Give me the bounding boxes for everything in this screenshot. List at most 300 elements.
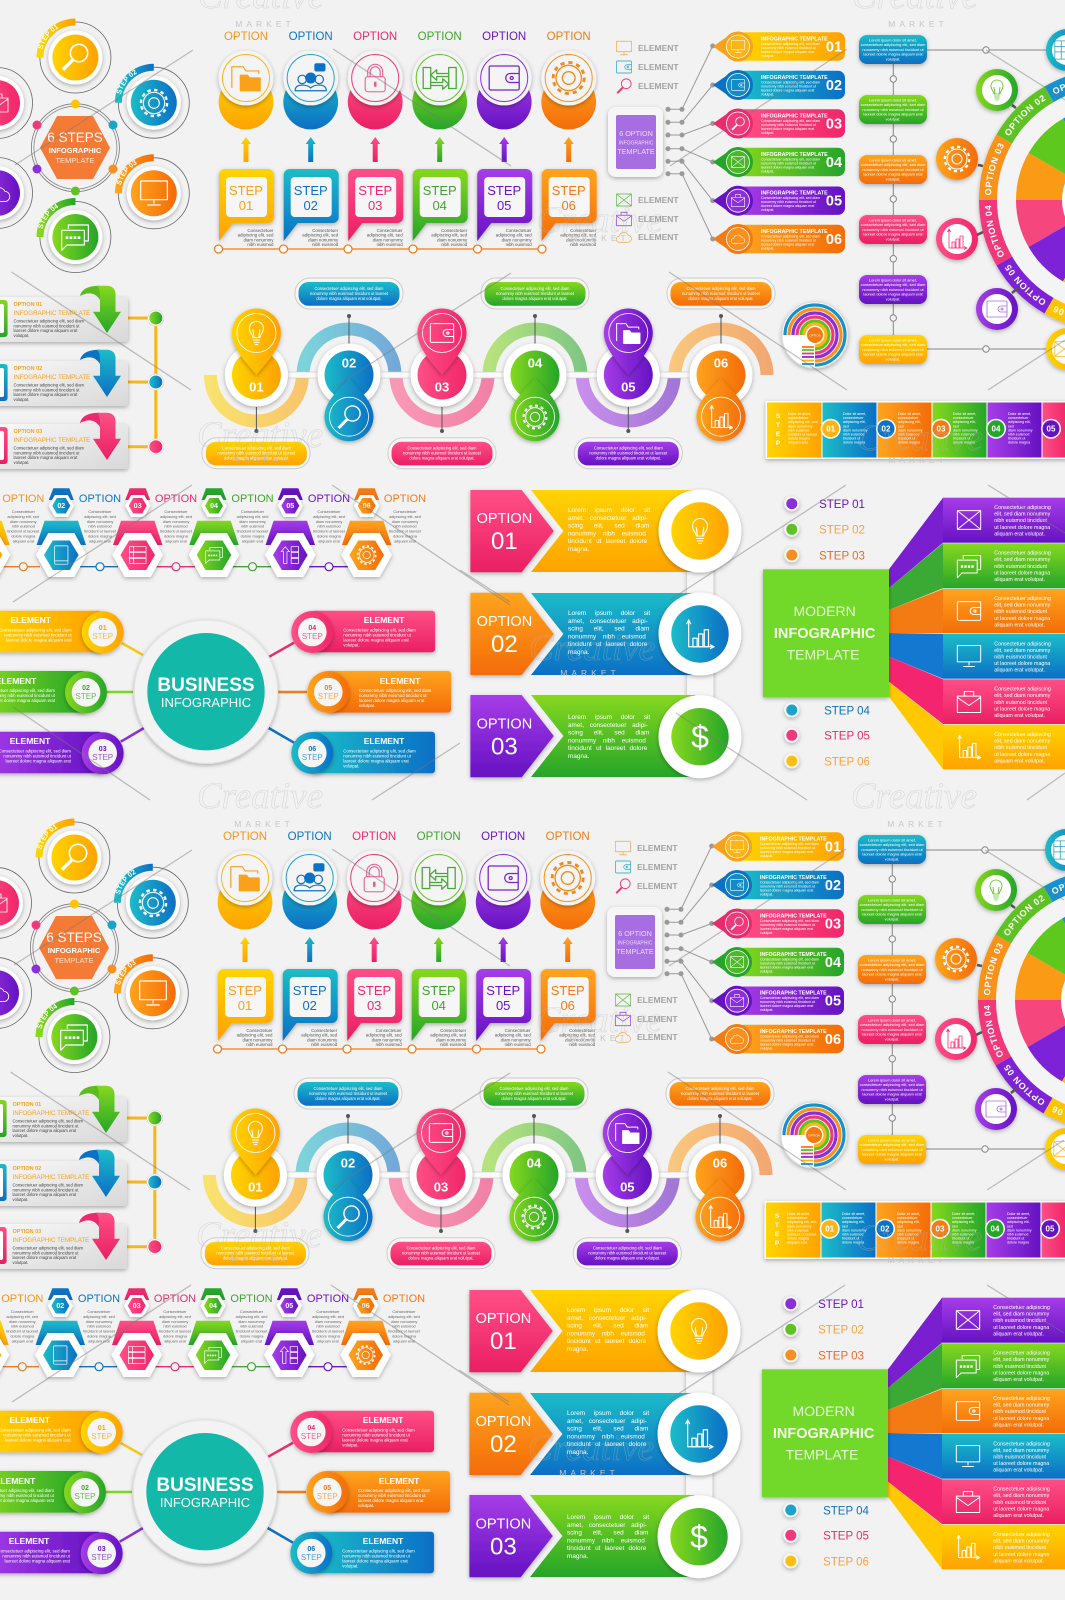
hexagon text: dolore magna bbox=[317, 534, 342, 538]
option columns text, lower sheet: Consectetuer bbox=[505, 1028, 531, 1033]
hexagon text: diam nonummy bbox=[392, 519, 418, 524]
hexagon text: aliquam erat bbox=[165, 538, 188, 543]
hub text bbox=[38, 24, 137, 229]
wave text: Consectetuer adipiscing elit, sed diam bbox=[315, 286, 384, 291]
wheel text: consectetuer adipiscing elit, sed diam bbox=[861, 222, 925, 227]
watermark overlay, upper sheet: MARKET bbox=[888, 455, 948, 465]
hub text, lower sheet: 6 STEPS bbox=[46, 930, 102, 945]
business text: volutpat. bbox=[359, 703, 375, 708]
option columns text: OPTION bbox=[289, 31, 333, 43]
option columns text: nibh euismod bbox=[312, 242, 339, 247]
wave text, lower sheet: nonummy nibh euismod tincidunt ut laoreet bbox=[216, 1250, 295, 1256]
chip text: laoreet dolore magna aliquam erat bbox=[761, 242, 814, 246]
business text, lower sheet: 05 bbox=[323, 1485, 331, 1492]
hexagon text, lower sheet: nibh euismod bbox=[316, 1324, 340, 1329]
chip text, lower sheet: Consectetuer adipiscing elit, sed diam bbox=[760, 880, 819, 884]
option columns text, lower sheet: diam nonummy bbox=[501, 1037, 532, 1042]
modern text: elit, sed diam nonummy bbox=[994, 648, 1051, 654]
option columns text, lower sheet: 02 bbox=[302, 998, 317, 1013]
chip text: laoreet dolore magna aliquam erat bbox=[761, 127, 814, 131]
wave text, lower sheet: 06 bbox=[713, 1156, 727, 1170]
wave text: adipiscing elit, sed bbox=[788, 420, 817, 424]
wheel text: consectetuer adipiscing elit, sed diam bbox=[861, 282, 925, 287]
wave text, lower sheet: Consectetuer adipiscing elit, sed diam bbox=[221, 1246, 290, 1250]
wheel text, lower sheet: OPTION 03 bbox=[984, 943, 1003, 995]
business text, lower sheet: ELEMENT bbox=[379, 1476, 420, 1486]
ribbons text, lower sheet: tincidunt ut laoreet dolore bbox=[567, 1545, 647, 1552]
hexagon text: 06 bbox=[363, 503, 371, 510]
modern text, lower sheet: Consectetuer adipiscing bbox=[993, 1396, 1050, 1402]
cards text: volutpat. bbox=[14, 333, 29, 338]
business text: nonummy nibh euismod tincidunt ut bbox=[359, 693, 427, 698]
modern text: nibh euismod tincidunt bbox=[994, 654, 1048, 660]
wave text, lower sheet: adipiscing elit, bbox=[897, 1220, 920, 1224]
cards text, lower sheet bbox=[12, 1102, 89, 1265]
modern text: Consectetuer adipiscing bbox=[994, 732, 1051, 738]
hexagon text, lower sheet: nibh euismod bbox=[11, 1324, 34, 1329]
wave text: nonummy nibh euismod tincidunt ut laoreet bbox=[496, 291, 575, 296]
business text, lower sheet: STEP bbox=[317, 1492, 338, 1501]
wave text: nibh euismod bbox=[898, 432, 919, 436]
business text, lower sheet: STEP bbox=[91, 1553, 112, 1562]
business text: ELEMENT bbox=[364, 736, 405, 746]
cards text, lower sheet: laoreet dolore magna aliquam erat bbox=[12, 1255, 77, 1260]
wave text, lower sheet: 01 bbox=[248, 1180, 263, 1194]
node 02 bbox=[318, 344, 380, 441]
wheel text, lower sheet: Lorem ipsum dolor sit amet, bbox=[868, 958, 916, 962]
hub text: 6 STEPS bbox=[47, 130, 103, 145]
wheel icon circles bbox=[936, 29, 1065, 370]
chip text, lower sheet: nonummy nibh euismod tincidunt ut bbox=[760, 923, 815, 927]
wheel text: Lorem ipsum dolor sit amet, bbox=[869, 158, 917, 162]
option columns text: 03 bbox=[368, 198, 382, 213]
chip text: Consectetuer adipiscing elit, sed diam bbox=[761, 119, 820, 123]
wave text, lower sheet: dolore magna aliquam erat volutpat. bbox=[408, 1256, 474, 1260]
wheel text: nonummy nibh euismod tincidunt ut bbox=[862, 347, 925, 352]
business text: nonummy nibh euismod tincidunt ut bbox=[3, 754, 72, 758]
wave text: dolore magna aliquam erat volutpat. bbox=[316, 296, 382, 301]
wave text, lower sheet: diam nonummy bbox=[897, 1228, 922, 1232]
wave text: dolore magna bbox=[898, 441, 920, 445]
modern text, lower sheet: STEP 01 bbox=[818, 1299, 864, 1311]
business text bbox=[0, 615, 432, 768]
modern text: Consectetuer adipiscing bbox=[994, 596, 1051, 602]
business text, lower sheet: ELEMENT bbox=[363, 1536, 404, 1546]
option columns text: OPTION bbox=[224, 31, 268, 43]
cards text: laoreet dolore magna aliquam erat bbox=[14, 328, 78, 333]
wave text: Dolor sit amet, bbox=[898, 412, 921, 416]
timeline lines bbox=[893, 50, 1060, 349]
modern text, lower sheet: aliquam erat volutpat. bbox=[993, 1513, 1044, 1519]
option columns text: adipiscing elit, sed bbox=[302, 233, 339, 238]
hex 04 bbox=[189, 488, 239, 577]
option columns text, lower sheet: 01 bbox=[238, 998, 252, 1013]
wave text: diam nonummy bbox=[788, 424, 813, 428]
business text, lower sheet: ELEMENT bbox=[9, 1536, 50, 1546]
chip text: TEMPLATE bbox=[617, 147, 655, 156]
chip text, lower sheet: laoreet dolore magna aliquam erat bbox=[760, 966, 813, 970]
panel: wheel diagram, lower sheet bbox=[856, 828, 1065, 1174]
panel: six option chip diagram, lower sheet bbox=[607, 832, 844, 1054]
hexagon text, lower sheet: nibh euismod bbox=[392, 1324, 416, 1329]
hexagon text: dolore magna bbox=[393, 534, 418, 538]
chip bbox=[608, 107, 663, 177]
hexagon text: nibh euismod bbox=[317, 524, 341, 529]
modern text, lower sheet: aliquam erat volutpat. bbox=[993, 1558, 1044, 1564]
wave text, lower sheet: aliquam erat. bbox=[787, 1241, 808, 1245]
hexagon text, lower sheet: nibh euismod bbox=[240, 1324, 263, 1329]
option columns text: diam nonummy bbox=[308, 237, 339, 242]
option columns text, lower sheet: 04 bbox=[431, 998, 446, 1013]
option columns text, lower sheet: nibh euismod bbox=[311, 1042, 338, 1047]
chip text: Consectetuer adipiscing elit, sed diam bbox=[761, 80, 820, 84]
ribbons text: tincidunt ut laoreet dolore bbox=[568, 745, 648, 752]
modern text: Consectetuer adipiscing bbox=[994, 505, 1051, 511]
wheel text: nonummy nibh euismod tincidunt ut bbox=[862, 287, 925, 292]
hub text, lower sheet: TEMPLATE bbox=[54, 956, 94, 965]
chip text, lower sheet: laoreet dolore magna aliquam erat bbox=[760, 1004, 813, 1008]
bar 06 bbox=[713, 224, 845, 254]
cards text, lower sheet: Consectetuer adipiscing elit, sed diam bbox=[12, 1118, 84, 1124]
wave text, lower sheet: dolore magna bbox=[952, 1241, 974, 1245]
business text: laoreet dolore magna aliquam erat bbox=[6, 638, 73, 642]
option columns text, lower sheet: STEP bbox=[486, 983, 520, 998]
option columns text: STEP bbox=[552, 183, 586, 198]
wave text, lower sheet: nibh euismod bbox=[787, 1228, 808, 1232]
ribbons text: 01 bbox=[491, 528, 518, 555]
ribbons text, lower sheet: Lorem ipsum dolor sit bbox=[567, 1307, 649, 1314]
ribbons text, lower sheet: magna. bbox=[567, 1449, 589, 1456]
wave text, lower sheet: OPTION bbox=[808, 1134, 820, 1138]
wave text: sed bbox=[1008, 424, 1014, 428]
hexagon text, lower sheet: nibh euismod bbox=[163, 1324, 187, 1329]
business text, lower sheet: volutpat. bbox=[342, 1564, 359, 1568]
chip text: Consectetuer adipiscing elit, sed diam bbox=[761, 234, 820, 238]
wave text, lower sheet: consectetuer bbox=[842, 1216, 863, 1220]
ribbons text: Lorem ipsum dolor sit bbox=[568, 507, 650, 514]
wave text, lower sheet: 04 bbox=[991, 1224, 1000, 1234]
hexagon text, lower sheet: OPTION bbox=[1, 1293, 43, 1305]
hexagon text: Consectetuer bbox=[88, 509, 112, 514]
wave text, lower sheet: adipiscing elit, sed bbox=[787, 1220, 816, 1224]
option columns text: nibh euismod bbox=[247, 242, 274, 247]
wheel text, lower sheet: laoreet dolore magna aliquam erat bbox=[862, 1152, 923, 1157]
hexagon text, lower sheet: OPTION bbox=[307, 1293, 349, 1305]
chip text: nonummy nibh euismod tincidunt ut bbox=[761, 162, 816, 166]
cards text, lower sheet: OPTION 03 bbox=[12, 1229, 41, 1235]
option columns text: 01 bbox=[239, 198, 253, 213]
option columns text: adipiscing elit, sed bbox=[431, 233, 468, 238]
wave text, lower sheet: Consectetuer adipiscing elit, sed diam bbox=[686, 1086, 755, 1091]
bar 02 bbox=[0, 671, 107, 713]
wave text, lower sheet: 05 bbox=[1046, 1224, 1055, 1234]
chip text, lower sheet: Consectetuer adipiscing elit, sed diam bbox=[760, 996, 819, 1000]
wave text, lower sheet: dolore magna aliquam erat volutpat. bbox=[223, 1256, 288, 1260]
column 02 bbox=[283, 51, 339, 241]
chip connectors bbox=[668, 46, 713, 239]
cards text: INFOGRAPHIC TEMPLATE bbox=[14, 310, 90, 317]
chip text: ELEMENT bbox=[638, 232, 679, 242]
hexagon text, lower sheet: OPTION bbox=[154, 1293, 196, 1305]
business text: Consectetuer adipiscing elit, sed diam bbox=[343, 628, 416, 632]
hexagon text, lower sheet bbox=[1, 1293, 425, 1343]
option columns text, lower sheet: nibh euismod bbox=[569, 1042, 596, 1047]
ribbons text: Lorem ipsum dolor sit bbox=[568, 610, 650, 617]
modern text: aliquam erat volutpat. bbox=[994, 758, 1045, 764]
hexagon text, lower sheet: adipiscing elit, sed bbox=[83, 1314, 115, 1319]
cards text: OPTION 03 bbox=[14, 429, 42, 435]
modern text: aliquam erat volutpat. bbox=[994, 668, 1045, 674]
wheel text: consectetuer adipiscing elit, sed diam bbox=[861, 162, 925, 167]
wave text, lower sheet: tincidunt ut bbox=[952, 1237, 969, 1241]
hexagon text, lower sheet: tincidunt ut laoreet bbox=[159, 1329, 192, 1334]
cards text, lower sheet: OPTION 01 bbox=[12, 1102, 41, 1108]
modern text, lower sheet: ut laoreet dolore magna bbox=[993, 1506, 1049, 1512]
wheel text, lower sheet: OPTION 05 bbox=[1004, 1064, 1044, 1105]
modern artwork bbox=[763, 496, 1065, 769]
modern text, lower sheet: elit, sed diam nonummy bbox=[993, 1403, 1050, 1409]
wave text, lower sheet: 04 bbox=[527, 1156, 542, 1170]
wave text, lower sheet: consectetuer bbox=[897, 1216, 918, 1220]
wave text, lower sheet: 05 bbox=[620, 1180, 635, 1194]
option columns text, lower sheet: STEP bbox=[293, 983, 327, 998]
chip text: Consectetuer adipiscing elit, sed diam bbox=[761, 196, 820, 200]
business text: laoreet dolore magna aliquam erat bbox=[343, 638, 410, 642]
watermark overlay, lower sheet: Creative bbox=[528, 1428, 654, 1469]
wave text, lower sheet: adipiscing elit, bbox=[952, 1220, 975, 1224]
modern text: nibh euismod tincidunt bbox=[994, 745, 1048, 751]
modern text, lower sheet: elit, sed diam nonummy bbox=[993, 1539, 1050, 1545]
modern text: elit, sed diam nonummy bbox=[994, 512, 1051, 518]
hub text, lower sheet: STEP 01 bbox=[37, 824, 58, 850]
cards text, lower sheet: nonummy nibh euismod tincidunt ut bbox=[12, 1250, 79, 1255]
hexagon text, lower sheet: dolore magna bbox=[316, 1334, 341, 1338]
modern text, lower sheet: elit, sed diam nonummy bbox=[993, 1448, 1050, 1454]
business text: 06 bbox=[308, 746, 316, 753]
chip text: INFOGRAPHIC TEMPLATE bbox=[761, 75, 828, 81]
cards text, lower sheet: INFOGRAPHIC TEMPLATE bbox=[12, 1174, 89, 1181]
modern text: STEP 01 bbox=[819, 499, 865, 511]
bar 01 bbox=[713, 32, 845, 62]
wave text: adipiscing elit, bbox=[953, 420, 976, 424]
option columns text: STEP bbox=[229, 183, 263, 198]
hexagon text: diam nonummy bbox=[316, 519, 342, 524]
wheel text, lower sheet: nonummy nibh euismod tincidunt ut bbox=[861, 1027, 924, 1032]
option columns text, lower sheet: nibh euismod bbox=[376, 1042, 402, 1047]
step circle 03 bbox=[118, 158, 189, 229]
wave text, lower sheet: dolore magna bbox=[787, 1237, 809, 1241]
business text: 03 bbox=[99, 746, 107, 753]
business text, lower sheet: Consectetuer adipiscing elit, sed diam bbox=[358, 1488, 431, 1493]
wheel text, lower sheet: consectetuer adipiscing elit, sed diam bbox=[860, 1082, 924, 1087]
chip text: Consectetuer adipiscing elit, sed diam bbox=[761, 42, 820, 46]
hexagon text, lower sheet: aliquam erat bbox=[317, 1338, 340, 1343]
hexagon text, lower sheet: dolore magna bbox=[163, 1334, 188, 1338]
hexagon text: OPTION bbox=[155, 493, 197, 505]
hexagon text, lower sheet: adipiscing elit, sed bbox=[388, 1314, 420, 1319]
chip text, lower sheet: Consectetuer adipiscing elit, sed diam bbox=[760, 958, 819, 962]
wave text, lower sheet: tincidunt ut bbox=[897, 1237, 914, 1241]
modern text, lower sheet: nibh euismod tincidunt bbox=[993, 1500, 1047, 1506]
chip text, lower sheet: ELEMENT bbox=[637, 843, 678, 853]
wheel text: consectetuer adipiscing elit, sed diam bbox=[861, 342, 925, 347]
ribbons text, lower sheet: $ bbox=[690, 1519, 708, 1555]
wheel text, lower sheet: volutpat. bbox=[885, 1156, 899, 1161]
wave text, lower sheet: consectetuer bbox=[1007, 1216, 1028, 1220]
cards text, lower sheet: INFOGRAPHIC TEMPLATE bbox=[12, 1237, 89, 1244]
option columns text, lower sheet bbox=[223, 831, 596, 1047]
wave text, lower sheet: diam nonummy bbox=[842, 1228, 867, 1232]
wheel text: volutpat. bbox=[886, 356, 900, 361]
wheel text, lower sheet: consectetuer adipiscing elit, sed diam bbox=[860, 842, 924, 847]
panel: option columns, lower sheet bbox=[214, 831, 596, 1053]
modern text, lower sheet: ut laoreet dolore magna bbox=[993, 1461, 1049, 1467]
wave text: sed bbox=[843, 424, 849, 428]
chip text, lower sheet bbox=[616, 836, 841, 1050]
ribbons text, lower sheet: tincidunt ut laoreet dolore bbox=[567, 1338, 647, 1345]
hexagon text: nibh euismod bbox=[393, 524, 417, 529]
hexagon text, lower sheet: Consectetuer bbox=[240, 1309, 264, 1314]
ribbon icons bbox=[957, 511, 981, 759]
cards text, lower sheet: nonummy nibh euismod tincidunt ut bbox=[12, 1187, 79, 1192]
option columns text, lower sheet: adipiscing elit, sed bbox=[237, 1033, 273, 1038]
wave text, lower sheet: E bbox=[775, 1231, 780, 1238]
modern text, lower sheet: aliquam erat volutpat. bbox=[993, 1377, 1044, 1383]
chip text: laoreet dolore magna aliquam erat bbox=[761, 88, 814, 92]
business text, lower sheet: STEP bbox=[301, 1553, 322, 1562]
ribbons text: 03 bbox=[491, 734, 518, 760]
hex timeline bbox=[0, 566, 348, 568]
business text, lower sheet: 04 bbox=[307, 1425, 315, 1432]
wave text: Consectetuer adipiscing elit, sed diam bbox=[594, 446, 663, 450]
option 02 row bbox=[470, 592, 742, 676]
cards text: INFOGRAPHIC TEMPLATE bbox=[14, 437, 90, 444]
hexagon text: tincidunt ut laoreet bbox=[84, 529, 117, 534]
wheel text: OPTION 05 bbox=[1004, 264, 1046, 305]
wave connecting bar bbox=[256, 372, 721, 378]
option columns text: adipiscing elit, sed bbox=[496, 233, 532, 238]
chip text: 06 bbox=[826, 232, 842, 248]
wave text: nonummy nibh euismod tincidunt ut laoreet bbox=[217, 450, 296, 456]
chip text, lower sheet: ELEMENT bbox=[637, 1014, 678, 1024]
business text, lower sheet: 01 bbox=[98, 1425, 106, 1432]
wave text: tincidunt ut bbox=[898, 437, 915, 441]
chip text, lower sheet: INFOGRAPHIC TEMPLATE bbox=[760, 875, 827, 881]
wave text: consectetuer bbox=[843, 416, 864, 420]
chip text, lower sheet: 05 bbox=[825, 994, 841, 1010]
wave text: Consectetuer adipiscing elit, sed diam bbox=[501, 286, 570, 291]
ribbons text, lower sheet: 02 bbox=[490, 1431, 517, 1458]
hub text: STEP 02 bbox=[116, 70, 137, 94]
hex 06 bbox=[341, 488, 392, 577]
business text, lower sheet: laoreet dolore magna aliquam erat bbox=[5, 1558, 71, 1564]
column 05 bbox=[477, 51, 532, 241]
cards text: volutpat. bbox=[14, 397, 29, 402]
modern text, lower sheet: TEMPLATE bbox=[786, 1446, 858, 1462]
ribbons text: magna. bbox=[568, 649, 590, 656]
wave text: P bbox=[776, 440, 781, 447]
chip text: ELEMENT bbox=[638, 62, 679, 72]
wave text, lower sheet: nibh euismod bbox=[952, 1232, 973, 1236]
watermark overlay, lower sheet: MARKET bbox=[234, 819, 294, 829]
wheel text, lower sheet: nonummy nibh euismod tincidunt ut bbox=[861, 967, 924, 972]
chip text: INFOGRAPHIC TEMPLATE bbox=[761, 114, 828, 120]
chip text, lower sheet: ELEMENT bbox=[637, 862, 678, 872]
watermark overlay, lower sheet: MARKET bbox=[231, 1253, 291, 1263]
wheel text: laoreet dolore magna aliquam erat bbox=[863, 52, 924, 57]
hub text, lower sheet: STEP 02 bbox=[116, 870, 136, 894]
option columns text, lower sheet: STEP bbox=[551, 983, 585, 998]
timeline nodes bbox=[890, 47, 989, 352]
business text, lower sheet: volutpat. bbox=[358, 1503, 374, 1508]
option columns text, lower sheet: 03 bbox=[367, 998, 381, 1013]
modern text, lower sheet: MODERN bbox=[792, 1403, 855, 1419]
wheel text, lower sheet: consectetuer adipiscing elit, sed diam bbox=[860, 962, 924, 967]
business text: STEP bbox=[92, 632, 113, 641]
watermark overlay, upper sheet bbox=[12, 0, 1065, 800]
wheel text: nonummy nibh euismod tincidunt ut bbox=[862, 47, 925, 52]
wave text: diam nonummy bbox=[953, 428, 978, 432]
node 03 bbox=[410, 308, 474, 406]
card 02 bbox=[0, 350, 128, 406]
cards text: OPTION 01 bbox=[14, 302, 42, 308]
wheel text: Lorem ipsum dolor sit amet, bbox=[869, 38, 917, 42]
wave text, lower sheet: nibh euismod bbox=[897, 1232, 918, 1236]
modern text, lower sheet bbox=[773, 1299, 1050, 1568]
wheel text: volutpat. bbox=[886, 176, 900, 181]
hexagon text: Consectetuer bbox=[393, 509, 417, 514]
wave text: adipiscing elit, bbox=[898, 420, 921, 424]
cards text: nonummy nibh euismod tincidunt ut bbox=[14, 387, 80, 392]
modern text: Consectetuer adipiscing bbox=[994, 551, 1051, 557]
hexagon text, lower sheet: diam nonummy bbox=[238, 1319, 265, 1324]
ribbon fronts bbox=[943, 498, 1065, 769]
business text: ELEMENT bbox=[380, 676, 421, 686]
wave text: adipiscing elit, bbox=[843, 420, 866, 424]
hexagon text, lower sheet: aliquam erat bbox=[164, 1338, 187, 1343]
wave text, lower sheet: dolore magna aliquam erat volutpat. bbox=[315, 1096, 381, 1101]
wave text, lower sheet: tincidunt ut bbox=[1007, 1237, 1024, 1241]
ribbons text, lower sheet: nonummy nibh euismod bbox=[567, 1433, 645, 1440]
option columns text, lower sheet: OPTION bbox=[546, 831, 590, 843]
option columns text, lower sheet: adipiscing elit, sed bbox=[366, 1033, 402, 1038]
wave text bbox=[217, 286, 1056, 460]
wave text, lower sheet: Dolor sit amet, bbox=[1007, 1212, 1030, 1216]
ribbons text: amet, consectetuer adipi- bbox=[568, 515, 648, 522]
option columns text: adipiscing elit, sed bbox=[560, 233, 597, 238]
watermark overlay, lower sheet: MARKET bbox=[887, 819, 947, 829]
ribbons text: tincidunt ut laoreet dolore bbox=[568, 641, 648, 648]
hexagon text, lower sheet: adipiscing elit, sed bbox=[236, 1314, 267, 1319]
bar 05 bbox=[713, 186, 845, 216]
bar 02 bbox=[713, 70, 845, 100]
wheel text, lower sheet: volutpat. bbox=[885, 1036, 899, 1041]
modern text bbox=[774, 499, 1051, 768]
modern text: STEP 05 bbox=[824, 731, 870, 743]
option columns text, lower sheet: STEP bbox=[422, 983, 456, 998]
chip text: INFOGRAPHIC TEMPLATE bbox=[761, 152, 828, 158]
modern text, lower sheet: elit, sed diam nonummy bbox=[993, 1493, 1050, 1499]
business text: INFOGRAPHIC bbox=[161, 695, 251, 710]
ribbons text, lower sheet: tincidunt ut laoreet dolore bbox=[567, 1441, 647, 1448]
wave text: tincidunt ut laoreet bbox=[788, 432, 817, 436]
modern text: aliquam erat volutpat. bbox=[994, 577, 1045, 583]
hexagon text: Consectetuer bbox=[241, 509, 265, 514]
chip text, lower sheet: volutpat. bbox=[760, 970, 773, 974]
business text: ELEMENT bbox=[10, 736, 51, 746]
ribbons text: OPTION bbox=[477, 716, 532, 732]
modern text, lower sheet: aliquam erat volutpat. bbox=[993, 1422, 1044, 1428]
